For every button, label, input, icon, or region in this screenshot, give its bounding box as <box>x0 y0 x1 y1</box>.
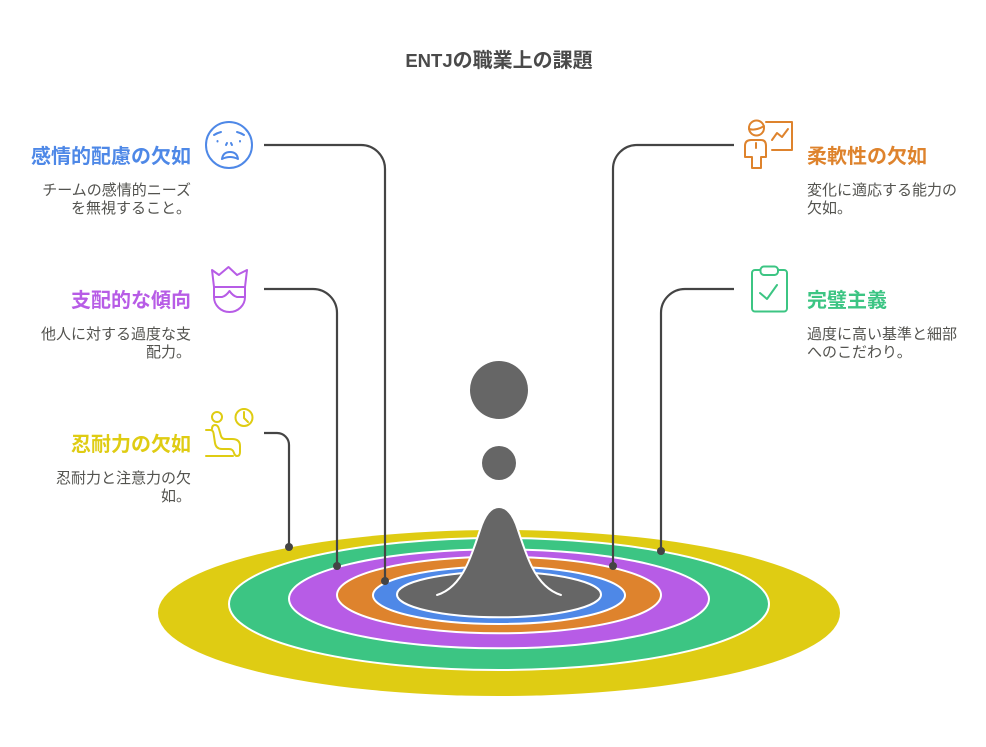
description: patience: 如。 <box>161 488 191 505</box>
description: perfectionism <box>807 326 957 361</box>
description: perfectionism: 過度に高い基準と細部 <box>807 326 957 343</box>
description: flexibility: 欠如。 <box>807 200 852 217</box>
description: empathy: チームの感情的ニーズ <box>42 182 191 199</box>
droplet peak <box>437 507 561 595</box>
text block: perfectionism <box>807 290 957 361</box>
icon: waiting person and clock <box>206 409 252 456</box>
description: dominance: 配力。 <box>146 344 191 361</box>
small droplet <box>482 446 516 480</box>
description: patience <box>56 470 191 505</box>
icon: clipboard with check <box>752 266 787 312</box>
heading: flexibility: 柔軟性の欠如 <box>807 146 927 168</box>
ring: empathy <box>373 567 625 624</box>
ring: centre <box>397 572 601 617</box>
connector: perfectionism <box>657 289 734 555</box>
large droplet <box>470 361 528 419</box>
text block: flexibility <box>807 146 957 217</box>
description: flexibility: 変化に適応する能力の <box>807 182 957 199</box>
description: empathy: を無視すること。 <box>71 200 191 217</box>
icon: crown and face <box>212 267 247 312</box>
ring: flexibility <box>337 557 661 633</box>
text block: empathy <box>31 146 191 217</box>
connector: dominance <box>264 289 341 570</box>
text block: patience <box>56 434 191 505</box>
ring: dominance <box>289 549 709 648</box>
ring: patience <box>158 530 840 696</box>
icon: presenter with chart <box>745 120 792 168</box>
description: patience: 忍耐力と注意力の欠 <box>56 470 191 487</box>
description: empathy <box>42 182 191 217</box>
description: dominance: 他人に対する過度な支 <box>41 326 191 343</box>
ring: perfectionism <box>229 538 769 670</box>
heading: empathy: 感情的配慮の欠如 <box>31 146 191 168</box>
description: flexibility <box>807 182 957 217</box>
icon: worried face <box>206 122 252 168</box>
connector: flexibility <box>609 145 734 570</box>
heading: patience: 忍耐力の欠如 <box>71 434 191 456</box>
connector: patience <box>264 433 293 551</box>
description: dominance <box>41 326 191 361</box>
text block: dominance <box>41 290 191 361</box>
connector: empathy <box>264 145 389 585</box>
concentric ring base <box>158 530 840 696</box>
description: perfectionism: へのこだわり。 <box>807 344 912 361</box>
heading: dominance: 支配的な傾向 <box>71 290 191 312</box>
heading: perfectionism: 完璧主義 <box>807 290 887 312</box>
title: ENTJの職業上の課題 <box>405 50 593 72</box>
